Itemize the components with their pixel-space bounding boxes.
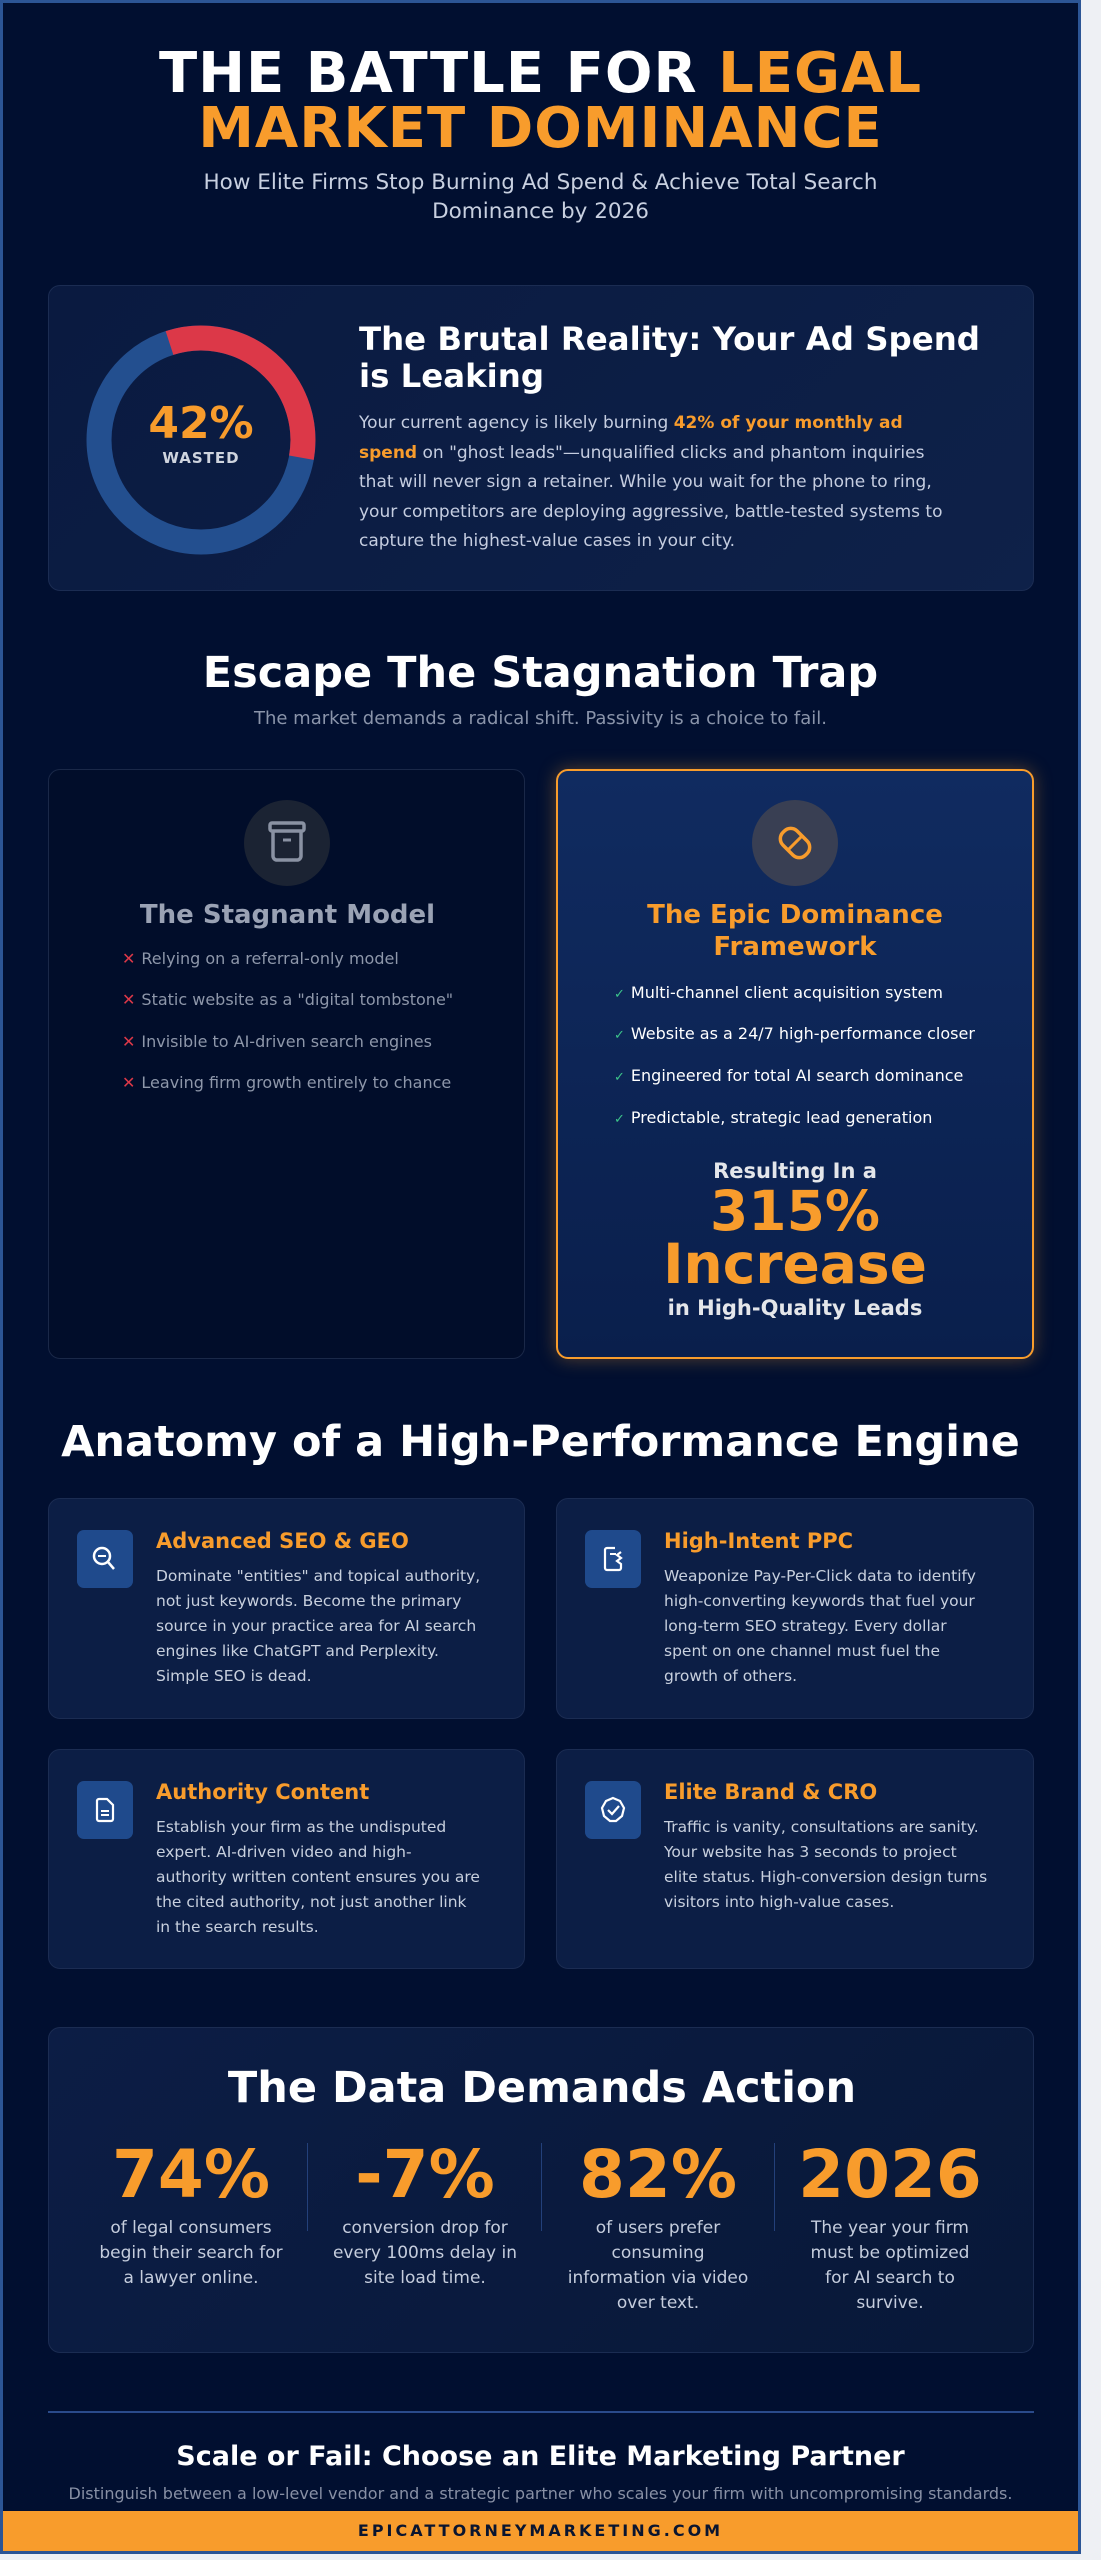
stat: 82% (568, 2136, 748, 2313)
icon: device (585, 1530, 641, 1588)
list: ✓ Engineered for total AI search dominance (614, 1066, 963, 1085)
panel: advanced seo (48, 1498, 525, 1719)
heading (359, 320, 980, 395)
result callout: Resulting In a (713, 1159, 877, 1183)
body: growth of others. (664, 1667, 797, 1685)
title: THE BATTLE FOR LEGAL (159, 41, 922, 106)
icon: badge check (585, 1781, 641, 1839)
heading: anatomy: Anatomy of a High-Performance Engine (61, 1417, 1020, 1467)
heading: The Data Demands Action (228, 2063, 856, 2113)
stat: 82%: 82% (579, 2136, 737, 2213)
donut label: WASTED (162, 449, 240, 467)
panel: ppc (556, 1498, 1034, 1719)
list: ✕ Relying on a referral-only model (122, 949, 399, 968)
stat: -7% (333, 2136, 517, 2288)
heading: The Epic Dominance (647, 900, 943, 930)
list: ✓ Website as a 24/7 high-performance closer (614, 1024, 975, 1043)
subheading: The market demands a radical shift. Passivity is a choice to fail. (254, 708, 827, 729)
subtitle: Dominance by 2026 (432, 199, 649, 224)
body: elite status. High-conversion design turns (664, 1868, 987, 1886)
title: Authority Content (156, 1780, 369, 1804)
subtitle: How Elite Firms Stop Burning Ad Spend & Achieve Total Search (204, 170, 877, 195)
stat: 2026: The year your firm must be optimized for AI search to survive. (811, 2218, 969, 2313)
heading (647, 900, 943, 962)
result callout: 315% (710, 1179, 880, 1243)
result callout: Increase (663, 1232, 927, 1296)
donut label: 42% (148, 398, 254, 449)
stat: 82%: of users prefer consuming information via video over text. (568, 2218, 748, 2313)
panel: authority content (48, 1749, 525, 1969)
heading: escape: Escape The Stagnation Trap (203, 648, 878, 698)
title (159, 41, 922, 161)
body: the cited authority, not just another link (156, 1893, 467, 1911)
stat: 2026: 2026 (798, 2136, 982, 2213)
heading: The Brutal Reality: Your Ad Spend (359, 320, 980, 358)
stat: -7%: conversion drop for every 100ms delay in site load time. (333, 2218, 517, 2288)
list: ✕ Leaving firm growth entirely to chance (122, 1073, 451, 1092)
stat: 74%: of legal consumers begin their search for a lawyer online. (99, 2218, 283, 2288)
icon: bandage (752, 800, 838, 886)
footer bar: EPICATTORNEYMARKETING.COM (358, 2521, 723, 2540)
title: MARKET DOMINANCE (198, 96, 883, 161)
panel: elite brand (556, 1749, 1034, 1969)
stat: -7%: -7% (355, 2136, 495, 2213)
body (156, 1818, 480, 1936)
panel: data demands action (48, 2027, 1034, 2353)
closing heading: Scale or Fail: Choose an Elite Marketing Partner (176, 2441, 905, 2472)
closing subtext: Distinguish between a low-level vendor and a strategic partner who scales your firm with uncompromising standards. (69, 2484, 1012, 2503)
result callout: in High-Quality Leads (668, 1296, 922, 1320)
list: ✓ Multi-channel client acquisition system (614, 983, 943, 1002)
body: in the search results. (156, 1918, 319, 1936)
footer bar (3, 2511, 1078, 2551)
list: ✕ Static website as a "digital tombstone" (122, 990, 453, 1009)
body: authority written content ensures you are (156, 1868, 480, 1886)
body: expert. AI-driven video and high- (156, 1843, 412, 1861)
body: Simple SEO is dead. (156, 1667, 312, 1685)
donut chart (86, 326, 316, 554)
body (664, 1818, 987, 1911)
body: Traffic is vanity, consultations are sanity. (664, 1818, 979, 1836)
icon: document (77, 1781, 133, 1839)
panel: stagnant model (48, 769, 525, 1359)
body: visitors into high-value cases. (664, 1893, 894, 1911)
heading: The Stagnant Model (140, 900, 435, 930)
subtitle (204, 170, 877, 224)
result callout (663, 1159, 927, 1320)
body (664, 1567, 976, 1685)
list (614, 983, 975, 1127)
stat: 74%: 74% (112, 2136, 270, 2213)
panel: epic dominance framework (556, 769, 1034, 1359)
body: spent on one channel must fuel the (664, 1642, 940, 1660)
paragraph: Your current agency is likely burning 42% of your monthly ad spend on "ghost leads"—unqualified clicks and phantom inquiries that will never sign a retainer. While you wait for the phone to ring, your competitors are deploying aggressive, battle-tested systems to capture the highest-value cases in your city. (359, 413, 942, 551)
heading: Framework (713, 932, 877, 962)
list: ✓ Predictable, strategic lead generation (614, 1108, 932, 1127)
body: Weaponize Pay-Per-Click data to identify high-converting keywords that fuel your long-term SEO strategy. Every dollar (664, 1567, 976, 1635)
title: High-Intent PPC (664, 1529, 853, 1553)
body: Your website has 3 seconds to project (664, 1843, 957, 1861)
icon: search (77, 1530, 133, 1588)
heading: is Leaking (359, 357, 544, 395)
title: Advanced SEO & GEO (156, 1529, 409, 1553)
body: Dominate "entities" and topical authority, not just keywords. Become the primary source in your practice area for AI search engines like ChatGPT and Perplexity. (156, 1567, 480, 1660)
stat: 2026 (798, 2136, 982, 2313)
list: ✕ Invisible to AI-driven search engines (122, 1032, 432, 1051)
body: Establish your firm as the undisputed (156, 1818, 446, 1836)
icon: archive box (244, 800, 330, 886)
list (122, 949, 453, 1092)
stat: 74% (99, 2136, 283, 2288)
title: Elite Brand & CRO (664, 1780, 877, 1804)
panel: brutal reality (48, 285, 1034, 591)
